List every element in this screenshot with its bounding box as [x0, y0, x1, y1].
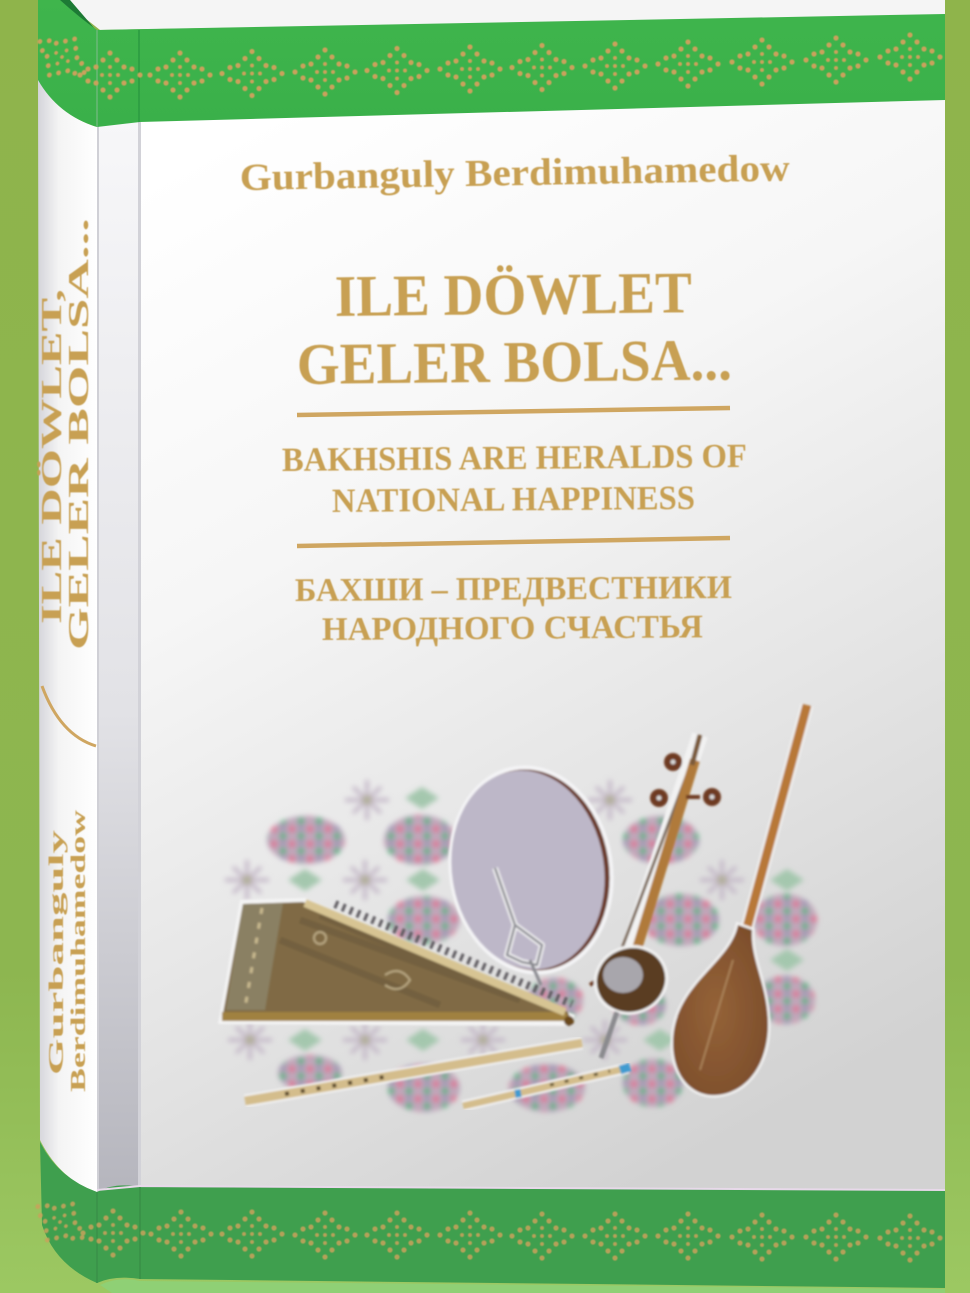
subtitle: English: NATIONAL HAPPINESS	[332, 480, 695, 520]
divider	[297, 408, 730, 415]
bottom band ornaments	[22, 1185, 943, 1263]
spine author	[44, 809, 90, 1092]
spine divider curve	[42, 686, 96, 746]
author name: Gurbanguly Berdimuhamedow	[239, 147, 791, 199]
subtitle: Russian: БАХШИ – ПРЕДВЕСТНИКИ	[295, 570, 732, 609]
icon: short flute	[463, 1067, 630, 1106]
divider	[297, 538, 730, 546]
icon: long flute	[245, 1043, 582, 1101]
icon: frame drum	[434, 753, 628, 987]
title: Turkmen	[296, 259, 732, 397]
bottom green band	[22, 1142, 945, 1293]
title: Turkmen: ILE DÖWLET	[334, 259, 692, 329]
subtitle: Russian	[295, 570, 732, 648]
subtitle: Russian: НАРОДНОГО СЧАСТЬЯ	[322, 609, 703, 648]
background carpet pattern	[225, 780, 817, 1112]
spine author: Gurbanguly	[44, 829, 68, 1075]
spine author: Berdimuhamedow	[66, 809, 90, 1092]
spine title: ILE DÖWLET,	[37, 289, 68, 624]
title: Turkmen: GELER BOLSA...	[296, 326, 732, 397]
icon: jaw harp	[495, 868, 542, 985]
panel: front cover	[96, 100, 945, 1200]
icon: qanun	[218, 898, 575, 1026]
spine title: GELER BOLSA...	[64, 218, 95, 650]
subtitle: English	[282, 438, 747, 520]
hinge strip	[97, 120, 140, 1195]
spine title	[37, 218, 95, 650]
top band ornaments	[24, 20, 943, 100]
subtitle: English: BAKHSHIS ARE HERALDS OF	[282, 438, 747, 479]
panel: spine	[38, 78, 97, 1192]
dark inside top corner	[58, 0, 95, 29]
icon: kamancha	[586, 735, 721, 1058]
icon: dutar	[673, 705, 807, 1095]
top green band	[24, 0, 945, 127]
page block top	[62, 0, 945, 30]
